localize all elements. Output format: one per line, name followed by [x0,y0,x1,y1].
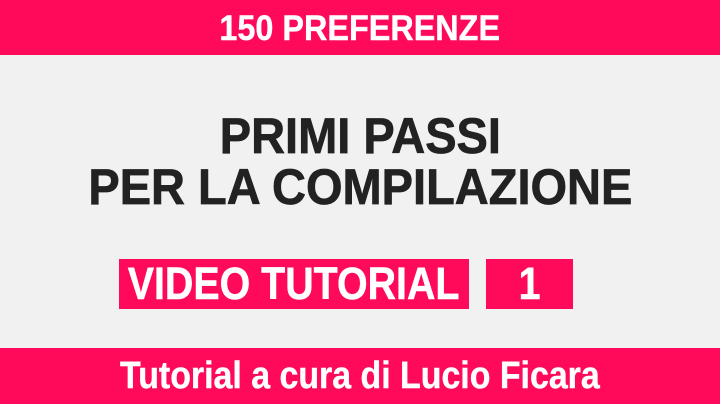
bottom banner: Tutorial a cura di Lucio Ficara [120,355,600,397]
title [88,108,632,215]
title: PER LA COMPILAZIONE [88,159,632,215]
tutorial number [486,259,573,309]
top banner: 150 PREFERENZE [220,9,500,48]
top banner [0,0,720,55]
title: PRIMI PASSI [219,108,501,164]
tutorial number: 1 [519,258,540,309]
video tutorial label: VIDEO TUTORIAL [128,258,460,309]
bottom banner [0,348,720,404]
